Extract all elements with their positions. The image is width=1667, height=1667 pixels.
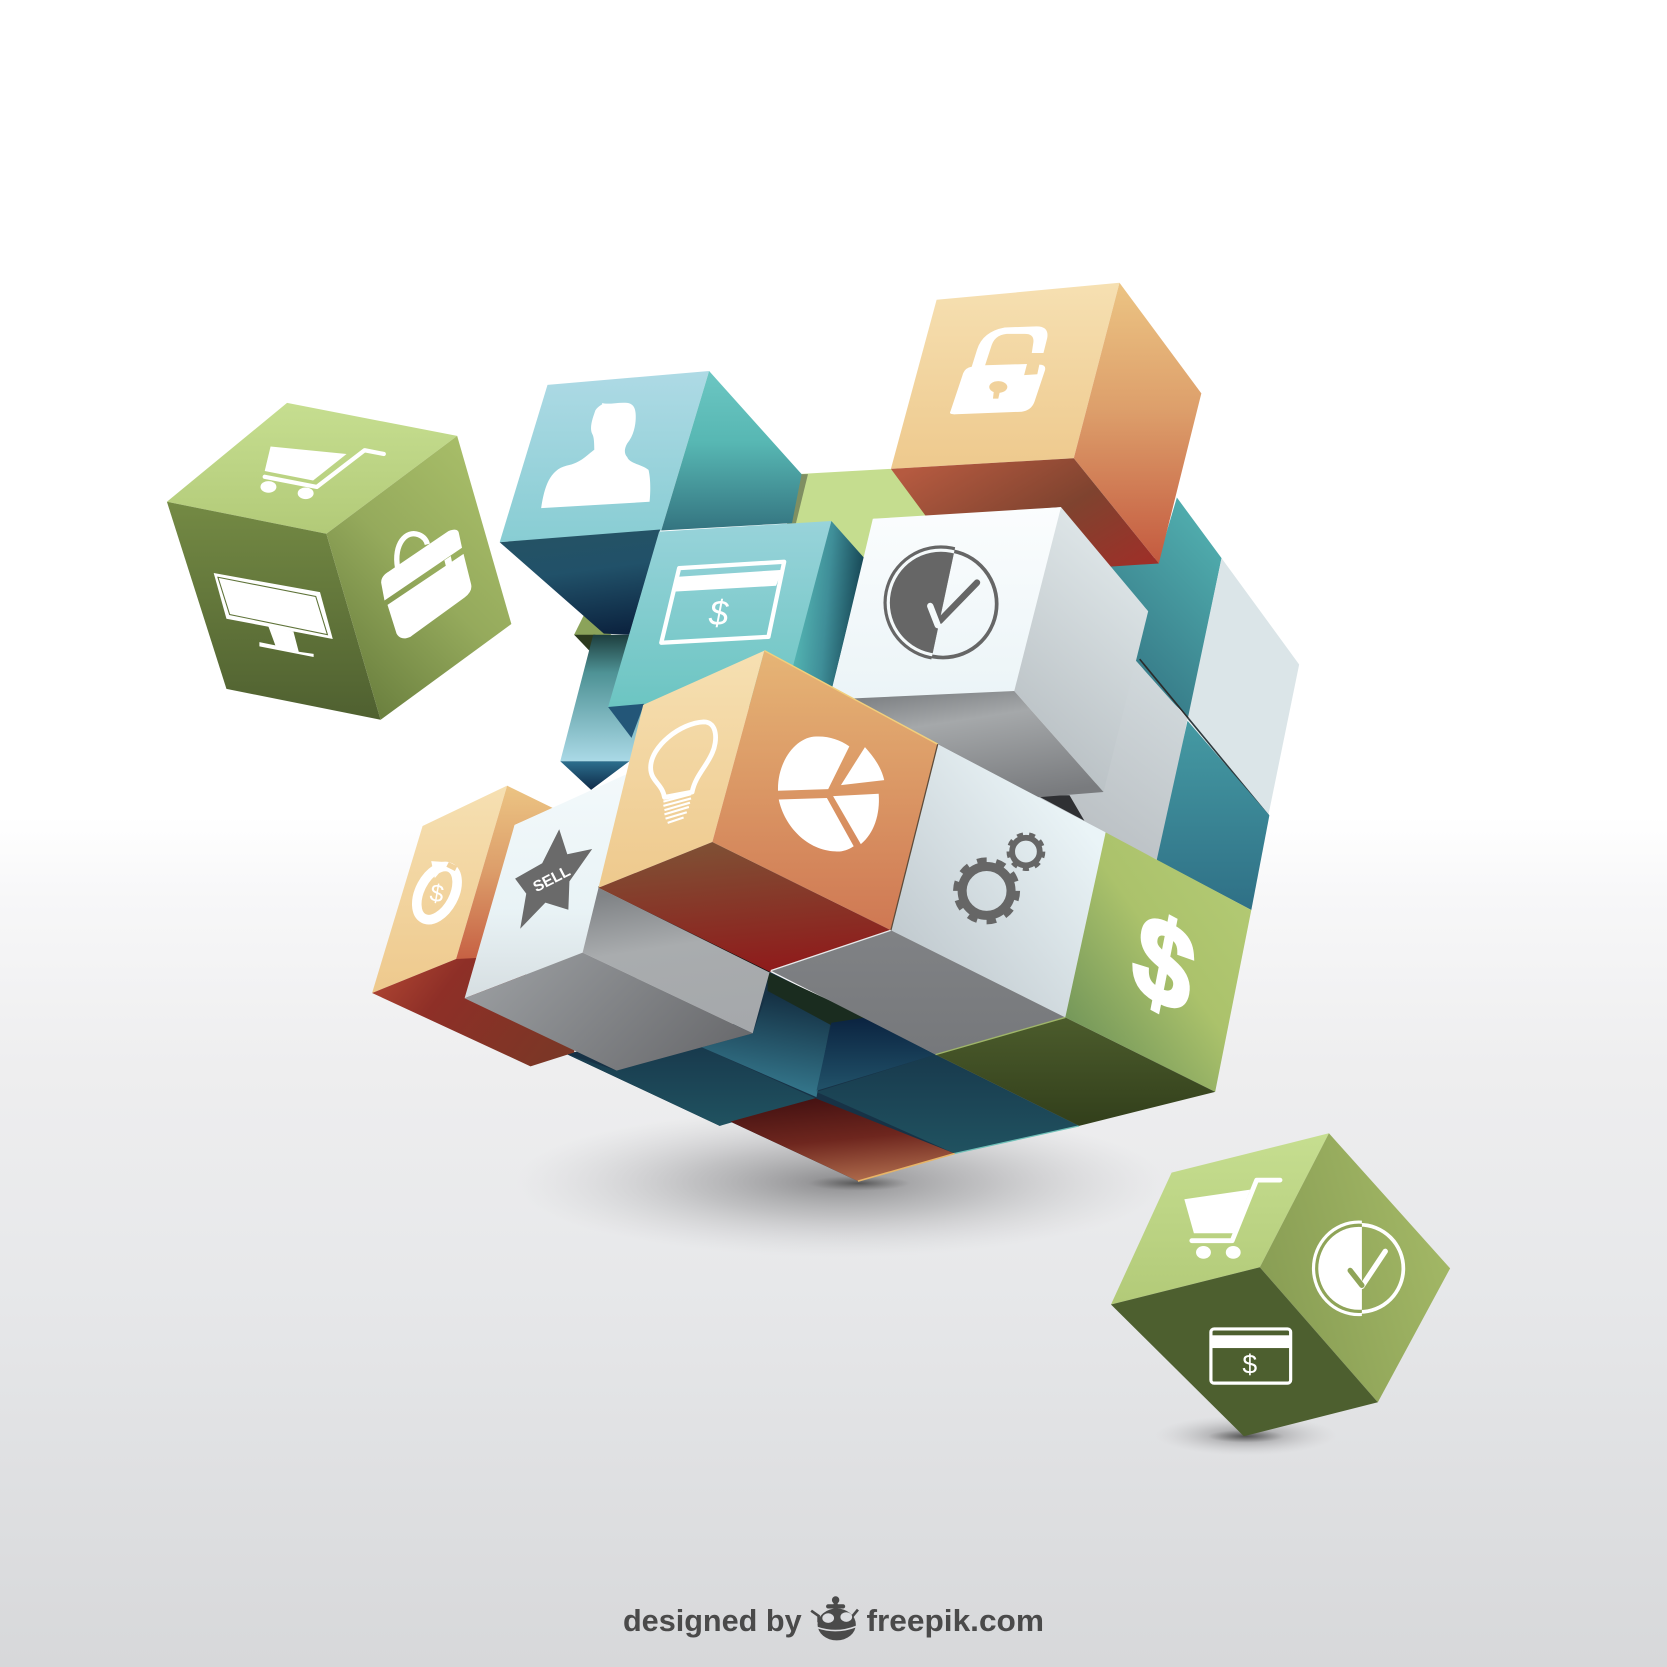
- cube: white clock block: [829, 507, 1148, 797]
- cube: white gears face and grey underside: [771, 744, 1106, 1055]
- shadow under main cube: [516, 1108, 1164, 1257]
- icon: SELL star: [515, 829, 592, 929]
- icon: SELL star: SELL: [530, 863, 573, 896]
- cube: pale grey right block: [1188, 558, 1299, 815]
- icon: freepik robot: [811, 1596, 858, 1640]
- icon: monitor: [214, 573, 333, 657]
- cube: green floating bottom-right: [1111, 1133, 1450, 1436]
- cube: white SELL block: [465, 773, 770, 1071]
- cube: grey block below clock: [1021, 651, 1189, 861]
- icon: clock with check: [1312, 1220, 1405, 1316]
- cube: blue card block: [608, 521, 864, 738]
- cube: orange dollar-cycle block: [372, 786, 579, 1066]
- icon: pie chart: [778, 737, 884, 852]
- panel: light green top block: [787, 469, 936, 561]
- icon: shopping cart: [260, 447, 384, 499]
- icon: open padlock: [950, 326, 1047, 414]
- icon: credit card: [661, 562, 784, 643]
- icon: credit card: $: [1242, 1350, 1257, 1380]
- cube: orange pie and bulb block: [599, 651, 938, 972]
- footer credit: [623, 1596, 1044, 1640]
- cube: teal right-lower block: [1157, 721, 1269, 910]
- icon: person silhouette: [541, 403, 650, 508]
- icon: light bulb: [651, 722, 716, 823]
- text: designed by: designed by: [623, 1604, 802, 1638]
- cube: blue person block: [500, 371, 802, 635]
- cube: green floating top-left: [167, 403, 511, 720]
- icon: clock with check: [883, 545, 998, 660]
- icon: briefcase: [382, 530, 471, 638]
- cube: green dollar block: [936, 832, 1251, 1126]
- cube: teal back block: [1095, 498, 1222, 718]
- icon: shopping cart: [1184, 1180, 1280, 1259]
- cube stack: lower blue back block: [560, 611, 644, 790]
- shadow under small cube: [1156, 1415, 1336, 1455]
- cube: under-layer blocks: [566, 972, 1079, 1181]
- cube: orange padlock block: [891, 283, 1201, 570]
- icon: credit card: [1211, 1329, 1291, 1383]
- icon: dollar sign: $: [1124, 886, 1204, 1041]
- icon: gears: [956, 834, 1043, 922]
- icon: credit card: $: [708, 594, 730, 633]
- icon: circular dollar arrow: $: [428, 880, 446, 909]
- icon: circular dollar arrow: [408, 860, 465, 926]
- text: freepik.com: freepik.com: [866, 1603, 1044, 1638]
